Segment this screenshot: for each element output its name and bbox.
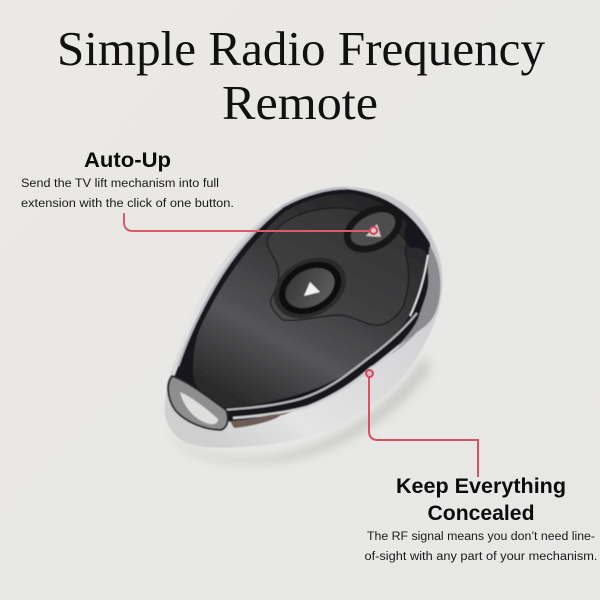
callout line: concealed (366, 370, 478, 477)
copper reflection (230, 414, 282, 428)
callout text: keep everything concealed (364, 475, 598, 563)
dark chrome rim (172, 189, 432, 422)
raised panel outline (267, 208, 409, 325)
heading: auto-up: Auto-Up (84, 149, 171, 172)
main button (263, 245, 357, 331)
chrome body (164, 187, 442, 448)
top button (336, 196, 410, 262)
heading: keep everything concealed: Keep Everything (396, 475, 566, 498)
description: keep everything concealed: The RF signal means you don’t need line- (367, 531, 595, 543)
remote photo illustration (164, 187, 442, 463)
description: keep everything concealed (364, 531, 598, 563)
chrome rim highlights (223, 313, 417, 410)
description: auto-up (21, 178, 234, 210)
key ring loop (168, 376, 228, 430)
title (57, 21, 545, 130)
callout line: auto-up (124, 213, 377, 234)
title: Remote (222, 75, 378, 130)
chrome reflection right (398, 246, 440, 346)
description: auto-up: extension with the click of one button. (21, 198, 234, 210)
remote face (193, 194, 427, 407)
description: keep everything concealed: of-sight with any part of your mechanism. (364, 551, 598, 563)
heading: keep everything concealed (396, 475, 566, 525)
callout text: auto-up (21, 149, 234, 210)
title: Simple Radio Frequency (57, 21, 545, 76)
remote shadow (166, 355, 430, 463)
heading: keep everything concealed: Concealed (428, 502, 534, 525)
description: auto-up: Send the TV lift mechanism into full (21, 178, 219, 190)
chrome left highlight (178, 188, 347, 366)
